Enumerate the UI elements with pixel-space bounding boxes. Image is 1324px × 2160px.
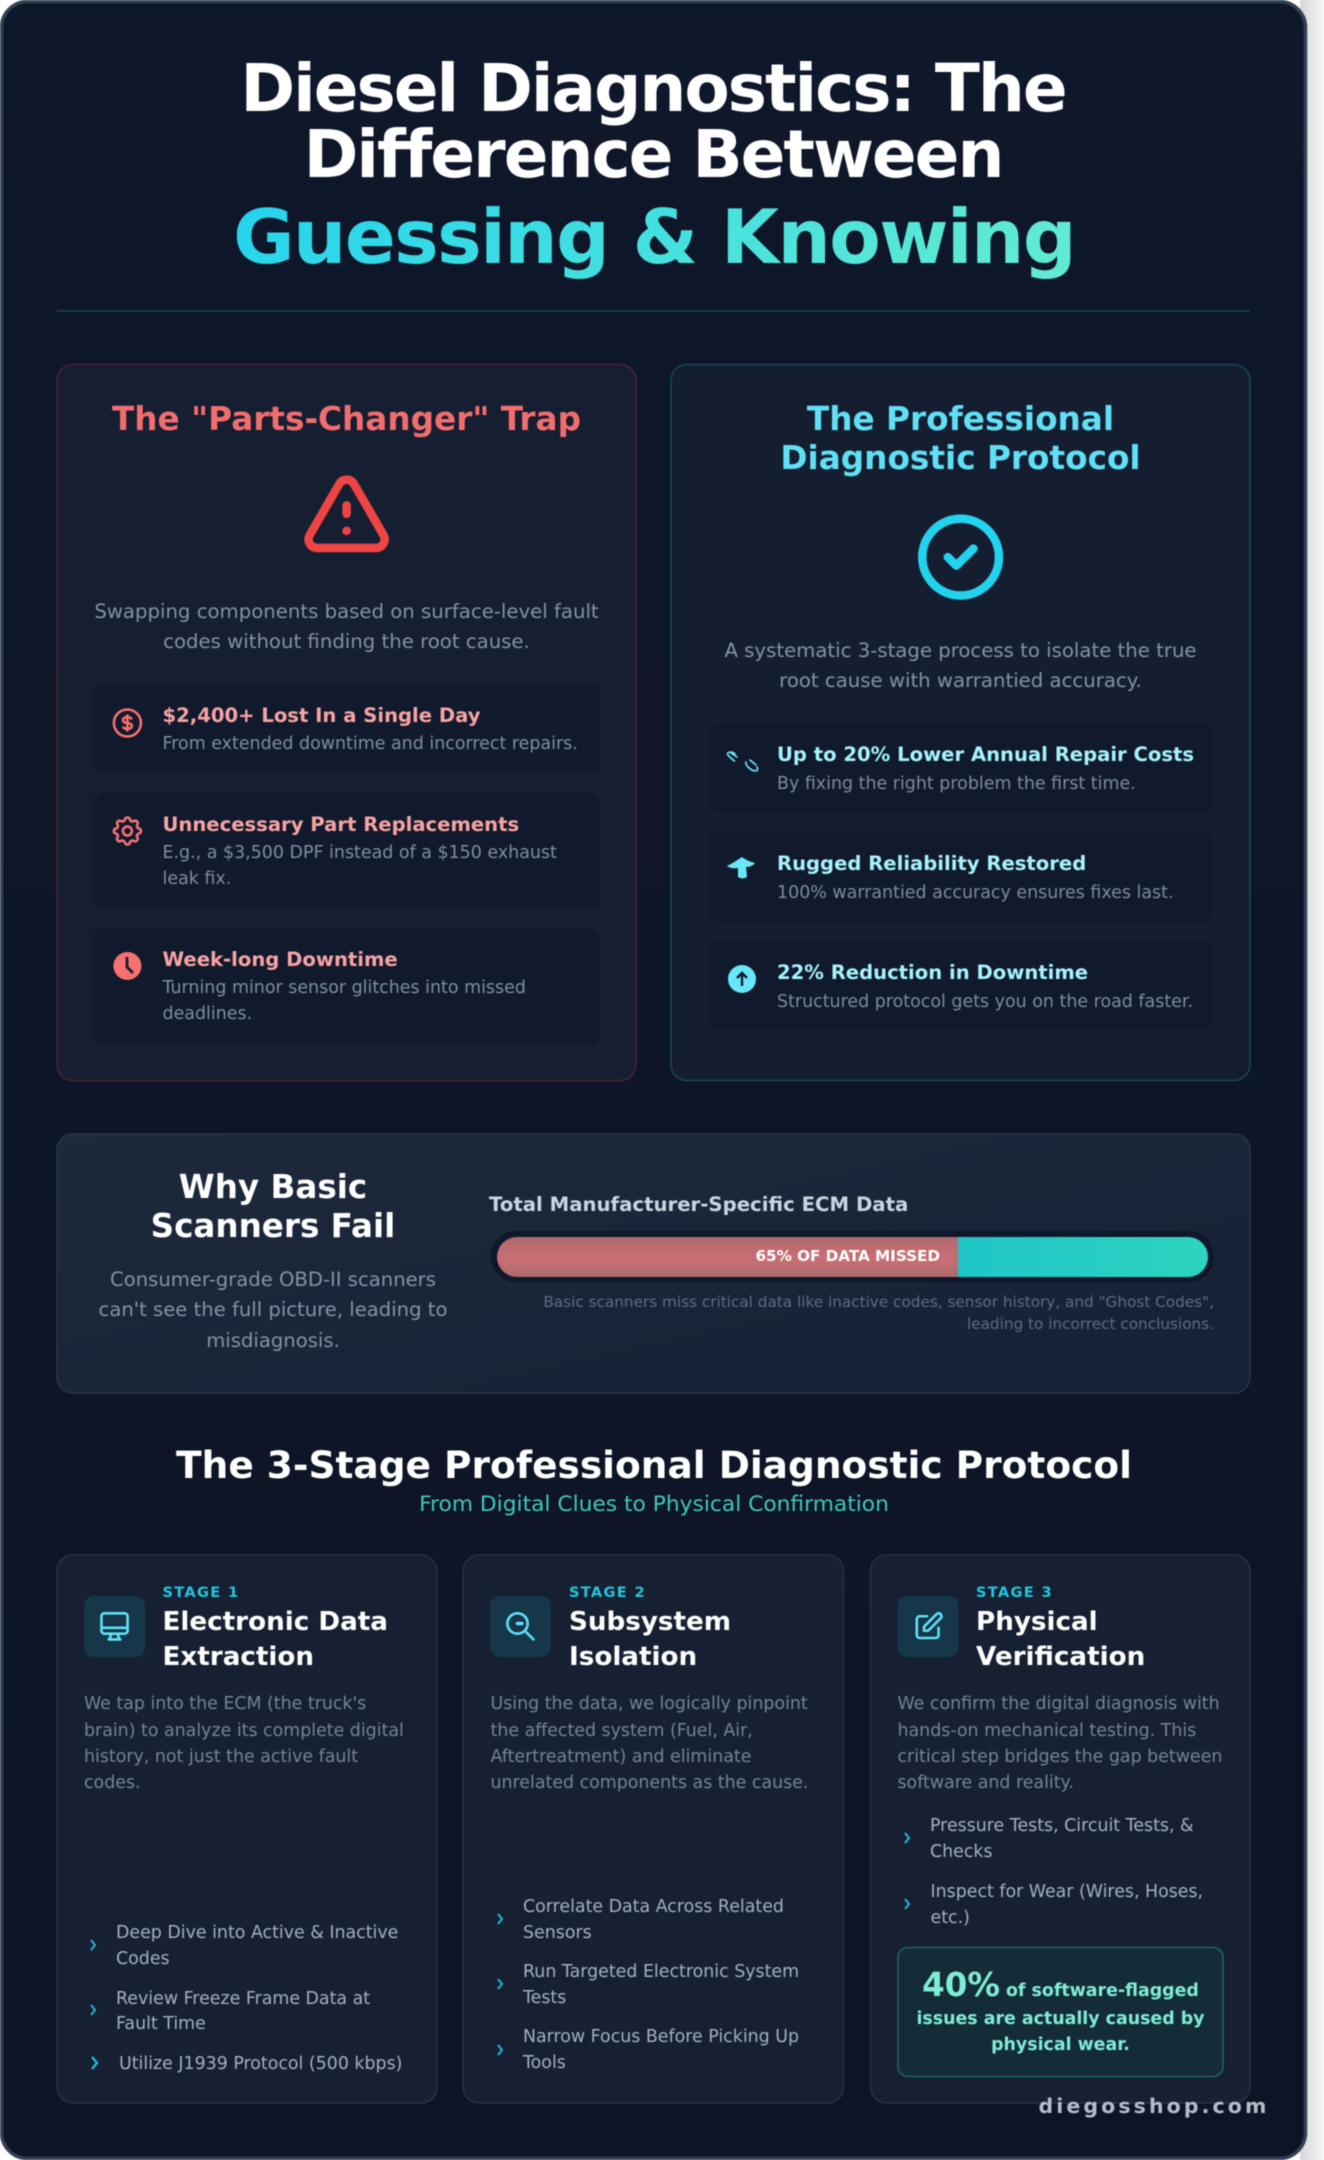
item: reliability: Rugged Reliability Restored — [777, 852, 1086, 875]
panel: stage 2 — [463, 1555, 844, 2103]
panel: stage 3 — [870, 1555, 1250, 2103]
heading: professional protocol — [780, 400, 1141, 477]
list: stage 3 checks: Inspect for Wear (Wires, Hoses, — [930, 1882, 1203, 1902]
stage label and title: Physical — [976, 1607, 1098, 1637]
list: stage 3 checks: Checks — [930, 1842, 993, 1862]
item: reduced downtime — [707, 940, 1214, 1030]
item: reduced downtime: Structured protocol gets you on the road faster. — [777, 992, 1193, 1012]
list: stage 2 checks: Narrow Focus Before Picking Up — [523, 2027, 799, 2047]
item: reduced downtime: 22% Reduction in Downtime — [777, 961, 1088, 984]
stage label and title: Verification — [976, 1642, 1145, 1672]
stage label and title: Isolation — [569, 1642, 697, 1672]
text: trap description: codes without finding the root cause. — [163, 630, 530, 653]
item: reliability: 100% warrantied accuracy ensures fixes last. — [777, 883, 1174, 903]
title: Diesel Diagnostics: The — [240, 50, 1066, 127]
list: stage 2 checks — [498, 1897, 799, 2073]
item: lower costs — [707, 723, 1214, 813]
chart: data coverage bar — [491, 1231, 1214, 1282]
stage label and title: STAGE 3 — [976, 1584, 1053, 1601]
item: downtime: deadlines. — [162, 1004, 252, 1024]
text: stage 2 description: Aftertreatment) and eliminate — [490, 1747, 751, 1767]
callout: 40 percent: issues are actually caused by — [916, 2009, 1205, 2029]
text: protocol description: root cause with warrantied accuracy. — [779, 669, 1142, 692]
item: unnecessary parts: leak fix. — [162, 869, 231, 889]
item: lower costs: By fixing the right problem the first time. — [777, 774, 1136, 794]
list: stage 3 checks — [905, 1816, 1203, 1928]
chart: data coverage bar: 65% OF DATA MISSED — [755, 1247, 940, 1265]
watermark: diegosshop.com — [1038, 2094, 1269, 2118]
text: stage 1 description: history, not just the active fault — [84, 1747, 358, 1767]
text: scanner description: Consumer-grade OBD-II scanners — [110, 1268, 436, 1291]
text: stage 1 description: brain) to analyze its complete digital — [84, 1721, 404, 1741]
text: stage 2 description: the affected system (Fuel, Air, — [490, 1721, 753, 1741]
title: Difference Between — [304, 116, 1002, 193]
item: unnecessary parts: Unnecessary Part Replacements — [162, 813, 519, 836]
text: stage 3 description — [898, 1694, 1222, 1793]
stage label and title: Electronic Data — [162, 1607, 388, 1637]
stage label and title: STAGE 2 — [569, 1584, 646, 1601]
item: unnecessary parts: E.g., a $3,500 DPF instead of a $150 exhaust — [162, 843, 557, 863]
callout: 40 percent — [898, 1948, 1223, 2076]
list: stage 1 checks — [91, 1923, 402, 2074]
title: Guessing & Knowing — [233, 193, 1075, 281]
text: stage 2 description — [490, 1694, 808, 1793]
item: money lost: From extended downtime and incorrect repairs. — [162, 734, 578, 754]
title — [233, 50, 1075, 281]
list: stage 1 checks: Utilize J1939 Protocol (500 kbps) — [119, 2054, 402, 2074]
item: downtime: Turning minor sensor glitches into missed — [162, 978, 526, 998]
item: unnecessary parts — [93, 793, 600, 909]
text: bar caption — [543, 1293, 1214, 1333]
text: scanner description: misdiagnosis. — [206, 1329, 340, 1352]
text: stage 3 description: hands-on mechanical testing. This — [898, 1721, 1196, 1741]
panel: stage 1 — [57, 1555, 437, 2103]
heading: why basic scanners fail: Why Basic — [179, 1168, 367, 1206]
text: bar caption: Basic scanners miss critical data like inactive codes, sensor history, and "Ghost Codes", — [543, 1293, 1214, 1311]
heading: why basic scanners fail — [151, 1168, 395, 1245]
text: bar caption: leading to incorrect conclusions. — [967, 1315, 1214, 1333]
list: stage 3 checks: etc.) — [930, 1908, 970, 1928]
text: stage 3 description: software and reality. — [898, 1773, 1074, 1793]
panel: professional protocol — [671, 364, 1250, 1080]
list: stage 2 checks: Run Targeted Electronic System — [523, 1962, 799, 1982]
text: protocol description: A systematic 3-stage process to isolate the true — [724, 639, 1197, 662]
heading: professional protocol: Diagnostic Protocol — [780, 439, 1141, 477]
stage label and title: STAGE 1 — [162, 1584, 239, 1601]
list: stage 2 checks: Tools — [522, 2053, 566, 2073]
text: stage 2 description: Using the data, we logically pinpoint — [490, 1694, 808, 1714]
icon: check circle — [922, 519, 999, 595]
stage label and title — [569, 1584, 731, 1672]
heading: 3-stage protocol: The 3-Stage Professional Diagnostic Protocol — [176, 1443, 1132, 1487]
list: stage 3 checks: Pressure Tests, Circuit Tests, & — [930, 1816, 1194, 1836]
text: scanner description: can't see the full picture, leading to — [99, 1298, 447, 1321]
heading: why basic scanners fail: Scanners Fail — [151, 1207, 395, 1245]
stage label and title: Extraction — [162, 1642, 314, 1672]
item: downtime — [93, 928, 600, 1044]
stage label and title — [162, 1584, 388, 1672]
icon: search — [490, 1596, 551, 1657]
icon: warning triangle — [309, 480, 385, 548]
panel: parts-changer trap — [57, 364, 636, 1080]
heading: professional protocol: The Professional — [807, 400, 1114, 438]
item: money lost: $2,400+ Lost In a Single Day — [162, 704, 481, 727]
list: stage 1 checks: Fault Time — [116, 2014, 206, 2034]
item: money lost — [93, 683, 600, 773]
item: lower costs: Up to 20% Lower Annual Repair Costs — [777, 743, 1194, 766]
text: stage 3 description: critical step bridges the gap between — [898, 1747, 1222, 1767]
panel: why basic scanners fail — [57, 1134, 1250, 1393]
stage label and title — [976, 1584, 1145, 1672]
text: trap description — [94, 600, 599, 653]
stage label and title: Subsystem — [569, 1607, 731, 1637]
text: stage 1 description: codes. — [84, 1773, 141, 1793]
label: bar title: Total Manufacturer-Specific ECM Data — [489, 1193, 908, 1216]
item: downtime: Week-long Downtime — [162, 948, 398, 971]
list: stage 2 checks: Tests — [522, 1988, 566, 2008]
text: trap description: Swapping components based on surface-level fault — [94, 600, 599, 623]
list: stage 2 checks: Correlate Data Across Related — [523, 1897, 784, 1917]
heading: parts-changer trap: The "Parts-Changer" Trap — [112, 400, 581, 438]
list: stage 1 checks: Review Freeze Frame Data at — [116, 1989, 370, 2009]
list: stage 1 checks: Deep Dive into Active & Inactive — [116, 1923, 398, 1943]
text: scanner description — [99, 1268, 447, 1352]
list: stage 2 checks: Sensors — [523, 1923, 592, 1943]
text: stage 2 description: unrelated components as the cause. — [490, 1773, 808, 1793]
text: protocol description — [724, 639, 1197, 692]
icon: pencil — [898, 1596, 958, 1657]
list: stage 1 checks: Codes — [116, 1949, 170, 1969]
text: stage 3 description: We confirm the digital diagnosis with — [898, 1694, 1220, 1714]
text: stage 1 description: We tap into the ECM (the truck's — [84, 1694, 366, 1714]
subheading: From Digital Clues to Physical Confirmation — [419, 1492, 889, 1517]
icon: monitor — [84, 1596, 145, 1657]
text: stage 1 description — [84, 1694, 404, 1793]
callout: 40 percent: 40% of software-flagged — [922, 1966, 1199, 2004]
item: reliability — [707, 831, 1214, 922]
callout: 40 percent: physical wear. — [991, 2035, 1130, 2055]
